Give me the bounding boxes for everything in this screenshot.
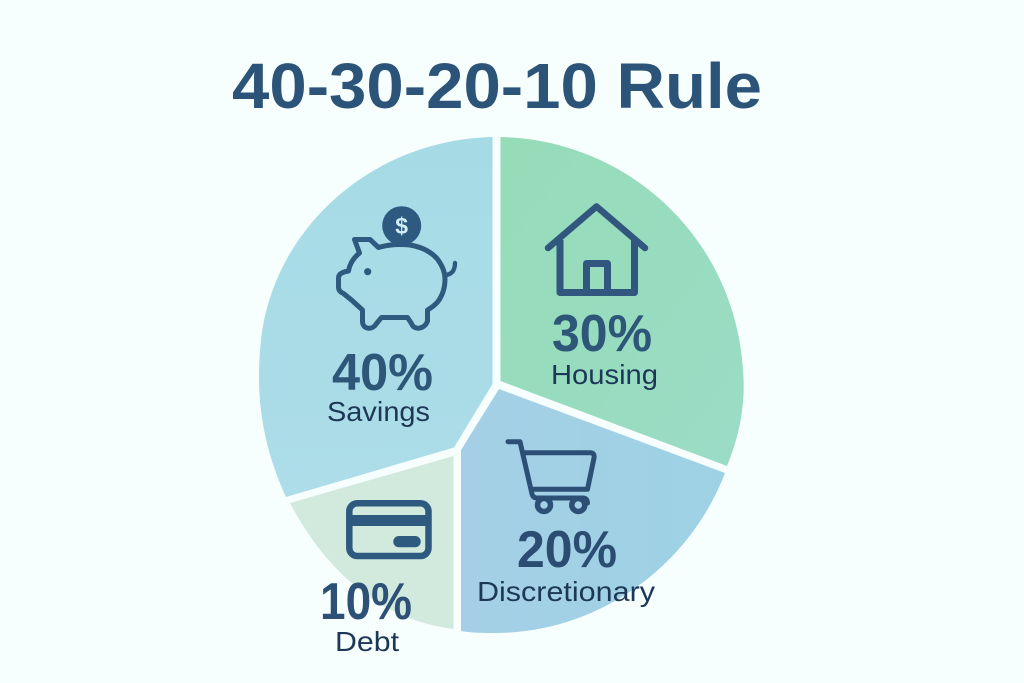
discretionary label: 20% xyxy=(517,521,617,579)
slice: debt 10% xyxy=(290,456,454,629)
pig tail xyxy=(444,263,455,275)
icon: piggy bank with coin xyxy=(338,206,455,328)
slice: savings 40% xyxy=(259,137,492,497)
pie chart xyxy=(259,137,744,633)
slice: housing 30% xyxy=(500,137,744,466)
savings label xyxy=(327,344,433,427)
pig eye xyxy=(364,268,371,275)
savings label: Savings xyxy=(327,396,430,427)
title: 40-30-20-10 Rule xyxy=(232,50,762,122)
slice: discretionary 20% xyxy=(461,389,725,633)
debt label: 10% xyxy=(320,573,412,631)
savings label: 40% xyxy=(332,344,433,402)
icon: house xyxy=(548,206,645,292)
icon: shopping cart xyxy=(508,442,594,512)
discretionary label xyxy=(477,521,655,607)
debt label xyxy=(320,573,412,657)
coin: $ xyxy=(395,213,408,239)
housing label: 30% xyxy=(552,305,652,363)
debt label: Debt xyxy=(335,626,399,657)
discretionary label: Discretionary xyxy=(477,576,655,607)
pig body xyxy=(338,240,445,328)
icon: credit card xyxy=(349,503,429,556)
housing label: Housing xyxy=(551,359,658,390)
housing label xyxy=(551,305,658,390)
